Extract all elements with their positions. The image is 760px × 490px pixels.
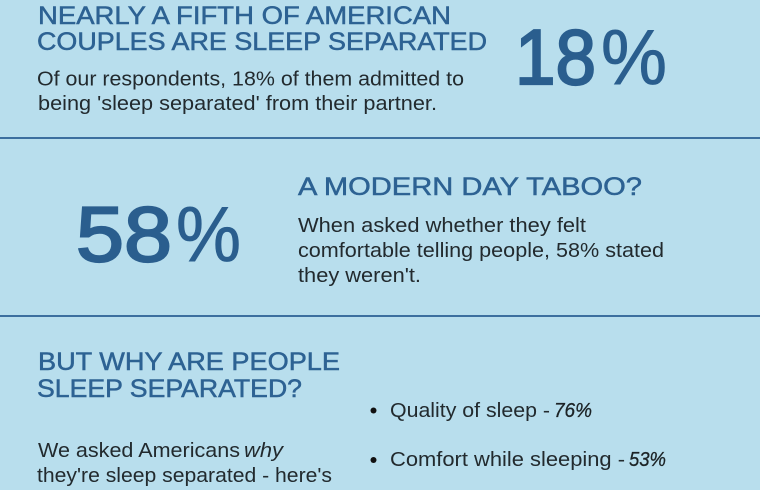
text block: comfortable telling [298,215,664,287]
heading: why: SLEEP SEPARATED? [37,375,302,403]
text block: comfortable telling: comfortable telling people, 58% stated [298,240,664,262]
text block: respondents [37,68,464,115]
bullet: quality of sleep: 76% [554,400,592,422]
heading: why [37,348,340,403]
text block: we asked: why [244,440,284,462]
heading: why: BUT WHY ARE PEOPLE [38,348,340,376]
big number: 18% [515,13,667,101]
heading: nearly a fifth: NEARLY A FIFTH OF AMERICAN [38,2,451,30]
text block: we asked: We asked Americans [38,440,240,462]
heading: taboo: A MODERN DAY TABOO? [298,173,642,201]
bullet: comfort while sleeping: 53% [629,449,666,471]
big number: 58%: 58 [76,190,172,278]
text block: comfortable telling: When asked whether they felt [298,215,586,237]
heading: nearly a fifth: COUPLES ARE SLEEP SEPARATED [37,28,487,56]
big number: 58%: % [176,190,241,278]
text block: respondents: Of our respondents, 18% of them admitted to [37,68,464,90]
bullet: quality of sleep: Quality of sleep - [390,400,550,422]
panel: why sleep separated [37,348,666,487]
text block: respondents: being 'sleep separated' from their partner. [38,93,437,115]
big number: 58% [76,190,241,278]
text block: we asked: they're sleep separated - here's [37,465,332,487]
bullet: comfort while sleeping: Comfort while sleeping - [390,449,625,471]
big number: 18%: 18 [515,13,596,101]
bullet: quality of sleep [370,400,592,422]
panel: modern day taboo [76,173,664,287]
text block: we asked [37,440,332,487]
text block: comfortable telling: they weren't. [298,265,421,287]
panel: nearly a fifth [37,2,667,115]
big number: 18%: % [601,13,667,101]
heading: nearly a fifth [37,2,487,56]
